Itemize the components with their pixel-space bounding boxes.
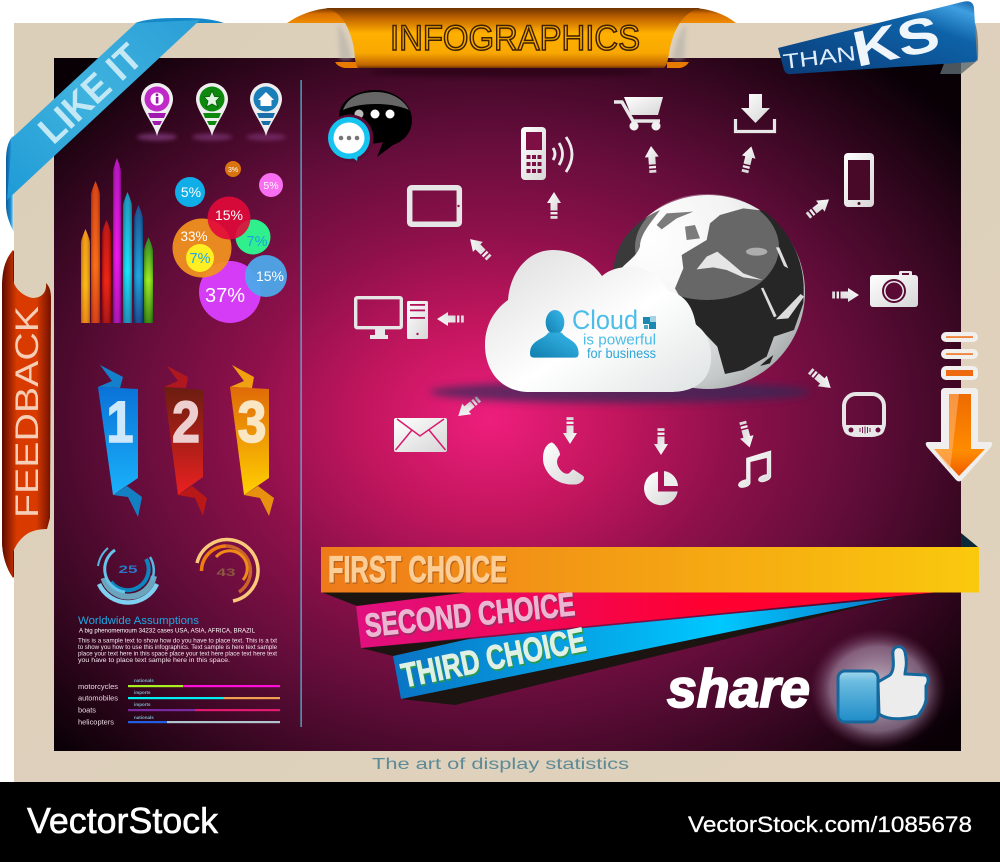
worldwide assumptions text: A big phenomemoum 34232 cases USA, ASIA, AFRICA, BRAZIL: [79, 628, 255, 634]
third choice banner: THIRD CHOICE: [398, 621, 589, 695]
globe land: [613, 208, 804, 374]
ribbon 2: 2: [172, 390, 200, 455]
cloud: for business: [587, 346, 656, 361]
first choice banner: FIRST CHOICE: [328, 549, 507, 590]
feedback ribbon: [2, 250, 51, 578]
icon: smartphone: [844, 153, 874, 207]
icon: pie chart: [644, 471, 678, 505]
horizontal bars: nationals: [134, 715, 154, 720]
map pins: [137, 83, 286, 140]
horizontal bars: motorcycles: [78, 682, 118, 691]
blue gauge: [98, 548, 157, 602]
ribbon 1: [98, 365, 142, 517]
numbered origami ribbons: [98, 365, 274, 517]
icon: shopping cart: [614, 97, 663, 130]
horizontal bars: helicopters: [78, 718, 114, 726]
ribbon 1: 1: [106, 390, 134, 455]
percentage bubbles: 5%: [181, 184, 201, 200]
percentage bubbles: 7%: [190, 251, 211, 267]
share label: share: [667, 659, 810, 719]
horizontal bars: automobiles: [78, 694, 118, 702]
icon: thumbs up: [810, 629, 946, 749]
second choice banner: SECOND CHOICE: [363, 585, 577, 644]
first choice banner: FIRST CHOICE: [329, 550, 508, 591]
percentage bubbles: 15%: [215, 207, 243, 223]
bar chart: [81, 158, 153, 323]
feedback text: FEEDBACK: [9, 306, 45, 518]
icon: desktop computer: [356, 298, 428, 339]
dark magenta panel: [54, 58, 961, 751]
thanks text: KS: [848, 5, 944, 78]
horizontal bars: boats: [78, 706, 96, 714]
globe: [611, 194, 805, 389]
pin: home: [246, 83, 286, 140]
like it ribbon: [7, 20, 200, 200]
percentage bubbles: 3%: [228, 167, 238, 174]
orange gauge: [197, 540, 258, 601]
watermark logo: VectorStock: [27, 800, 219, 841]
watermark id: VectorStock.com/1085678: [688, 812, 972, 837]
icon: telephone handset: [543, 442, 584, 485]
gauge value 25: 25: [118, 564, 138, 576]
cloud: [485, 250, 711, 392]
title ribbon back wings: [287, 8, 736, 23]
arrows radiating from cloud: [437, 145, 859, 455]
icon: music note: [739, 451, 771, 487]
feedback ribbon back fold: [2, 250, 14, 578]
pin: info: [137, 83, 177, 140]
cloud: is powerful: [583, 332, 656, 348]
percentage bubbles: 5%: [263, 180, 279, 192]
ribbon 3: 3: [238, 390, 266, 455]
thanks ribbon: [778, 1, 978, 78]
icon: tablet: [410, 188, 460, 224]
title: INFOGRAPHICS: [390, 19, 640, 58]
icon: download: [736, 94, 774, 132]
percentage bubbles: 7%: [247, 234, 268, 250]
like it text: LIKE IT: [31, 36, 151, 152]
worldwide assumptions text: Worldwide Assumptions: [78, 615, 200, 627]
scroll down arrow: [926, 332, 992, 482]
horizontal bars: [78, 678, 280, 726]
seas: [697, 247, 804, 319]
pin: star: [192, 83, 232, 140]
icon: tv: [843, 394, 885, 436]
worldwide assumptions text: you have to place text sample here in this space.: [78, 657, 230, 664]
worldwide assumptions text: place your text here in this space place your text here place text here text: [78, 650, 277, 658]
icon: envelope: [394, 418, 447, 452]
worldwide assumptions text: to show you how to use this infographics. Text sample is here text sample: [78, 644, 278, 651]
worldwide assumptions text: [78, 615, 278, 664]
ribbon 2: [164, 366, 207, 516]
title ribbon: [326, 8, 700, 77]
like it ribbon back folds: [6, 18, 224, 232]
column divider: [300, 80, 302, 727]
caption: The art of display statistics: [372, 756, 629, 773]
icon: chat bubbles: [326, 90, 412, 162]
horizontal bars: imports: [134, 690, 151, 695]
cloud text: Cloud: [572, 305, 638, 335]
third choice banner: THIRD CHOICE: [399, 622, 590, 697]
second choice banner: SECOND CHOICE: [364, 587, 578, 645]
percentage bubbles: 15%: [256, 268, 284, 284]
icon: mobile phone: [521, 127, 572, 180]
icon: person: [530, 310, 579, 358]
gauge value 43: 43: [216, 567, 236, 579]
horizontal bars: nationals: [134, 678, 154, 683]
second choice banner: [356, 585, 960, 656]
third choice banner: [393, 598, 895, 705]
icon: squares: [643, 316, 656, 329]
first choice banner: [321, 547, 979, 592]
watermark bar: [0, 782, 1000, 862]
horizontal bars: imports: [134, 702, 151, 707]
percentage bubbles: 37%: [205, 285, 245, 307]
percentage bubbles: 33%: [180, 229, 208, 244]
ribbon 3: [230, 365, 274, 516]
icon: camera: [870, 271, 918, 307]
thanks text: THAN: [782, 42, 857, 74]
percentage bubbles: [172, 161, 287, 323]
choice banners: [321, 533, 979, 705]
worldwide assumptions text: This is a sample text to show how do you have to place text. This is a txt: [78, 638, 277, 644]
cloud shadow: [430, 381, 810, 403]
thanks text: [782, 5, 944, 78]
